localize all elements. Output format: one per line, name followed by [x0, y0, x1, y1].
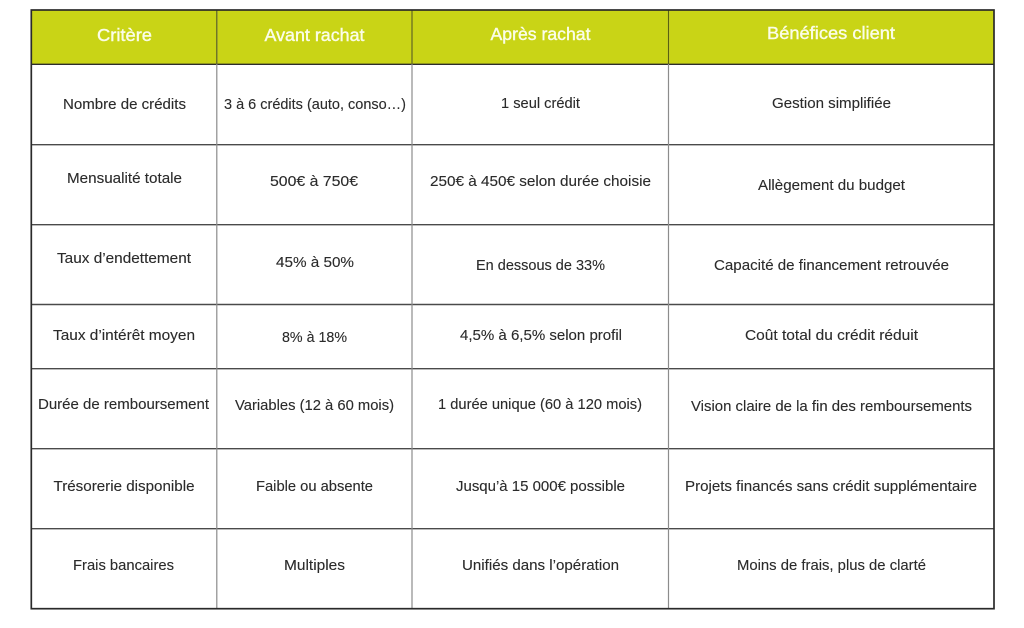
row: Mensualité totale: 500€ à 750€ — [270, 173, 359, 190]
row: Frais bancaires: Unifiés dans l’opération — [462, 557, 619, 574]
row: Taux d'endettement: Taux d’endettement — [57, 250, 192, 267]
row: Durée de remboursement: Durée de remboursement — [38, 396, 210, 413]
row: Frais bancaires: Frais bancaires — [73, 557, 174, 574]
row: Durée de remboursement: Vision claire de la fin des remboursements — [691, 398, 972, 415]
row: Trésorerie disponible: Jusqu’à 15 000€ possible — [456, 478, 625, 495]
row: Frais bancaires — [73, 557, 926, 574]
row: Durée de remboursement — [38, 396, 972, 415]
row: Nombre de crédits: 1 seul crédit — [501, 95, 581, 112]
row: Mensualité totale — [67, 170, 906, 194]
row: Taux d'endettement: Capacité de financement retrouvée — [714, 257, 949, 274]
header: Bénéfices client: Bénéfices client — [767, 23, 895, 43]
header: Critère: Critère — [97, 25, 152, 45]
row: Trésorerie disponible: Faible ou absente — [256, 478, 373, 495]
row: Durée de remboursement: Variables (12 à 60 mois) — [235, 397, 394, 414]
row: Taux d'endettement: En dessous de 33% — [476, 257, 605, 274]
row: Trésorerie disponible: Trésorerie disponible — [54, 478, 195, 495]
row: Taux d'intérêt moyen: Taux d’intérêt moyen — [53, 327, 195, 344]
row: Durée de remboursement: 1 durée unique (60 à 120 mois) — [438, 396, 642, 413]
header: Après rachat: Après rachat — [490, 24, 591, 44]
row: Frais bancaires: Moins de frais, plus de clarté — [737, 557, 926, 574]
row: Mensualité totale: Mensualité totale — [67, 170, 182, 187]
table header band — [31, 10, 994, 64]
row: Frais bancaires: Multiples — [284, 557, 345, 574]
row: Nombre de crédits — [63, 95, 891, 113]
row: Taux d'endettement: 45% à 50% — [276, 254, 354, 271]
row: Taux d'intérêt moyen — [53, 327, 919, 346]
row: Taux d'intérêt moyen: 4,5% à 6,5% selon profil — [460, 327, 622, 344]
row: Nombre de crédits: 3 à 6 crédits (auto, conso…) — [224, 96, 406, 113]
header row — [97, 23, 895, 45]
row: Trésorerie disponible — [54, 478, 977, 495]
row: Trésorerie disponible: Projets financés sans crédit supplémentaire — [685, 478, 977, 495]
row: Taux d'intérêt moyen: Coût total du crédit réduit — [745, 327, 919, 344]
row: Taux d'intérêt moyen: 8% à 18% — [282, 329, 347, 346]
row: Mensualité totale: 250€ à 450€ selon durée choisie — [430, 173, 651, 190]
row: Nombre de crédits: Nombre de crédits — [63, 96, 186, 113]
header: Avant rachat: Avant rachat — [264, 25, 365, 45]
row: Nombre de crédits: Gestion simplifiée — [772, 95, 891, 112]
row: Mensualité totale: Allègement du budget — [758, 177, 906, 194]
row: Taux d'endettement — [57, 250, 949, 274]
